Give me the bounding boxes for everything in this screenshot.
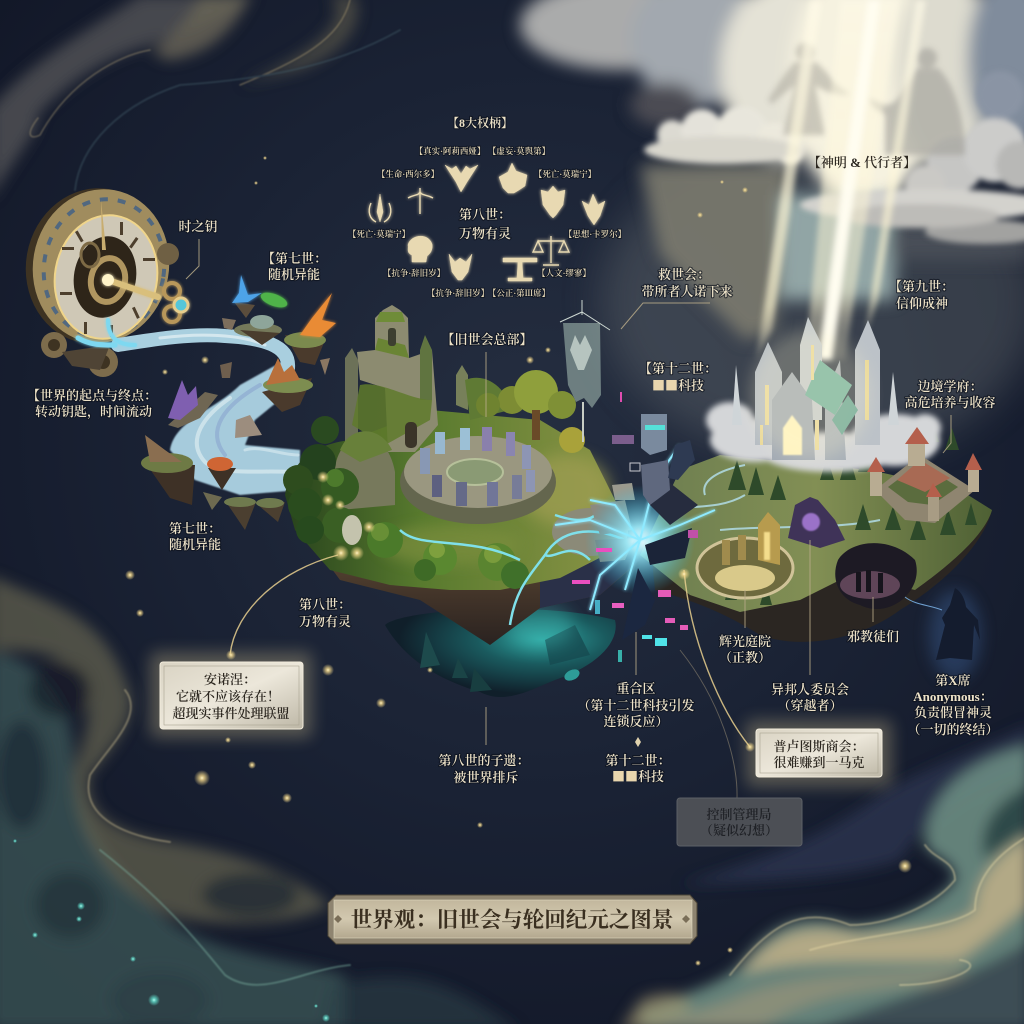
label: seat X anonymous [907,673,999,737]
authorities heading: 【8大权柄】 [447,115,513,130]
label: twelfth era top [639,361,717,394]
label: outsiders committee: （穿越者） [777,698,843,713]
sparkles [13,156,912,1022]
cracked rock [590,483,635,562]
label: eighth era remnants: 第八世的子遗： [438,753,530,768]
sky: clouds and divine figures [520,0,1024,460]
divine figure left [768,43,848,135]
label: overlap zone: 连锁反应） [603,714,669,729]
right island surface [640,455,992,612]
emblem: lion crest [499,163,527,193]
label: seat X anonymous: （一切的终结） [907,722,999,737]
label: twelfth era bottom [605,753,671,785]
hooded figure: Anonymous [905,588,981,680]
panel: Plutus guild callout [746,720,892,787]
council platform and thrones [400,427,556,524]
cult cave [835,543,917,609]
crystal shrine [788,497,845,548]
label: salvation church: 带所者人诺下来 [641,284,733,299]
authorities names [348,146,626,298]
panel: Anomie callout [150,652,312,738]
central era text: 第八世： [459,207,511,222]
label: eighth era: 万物有灵 [299,614,351,629]
island grass surface [285,410,625,590]
overlap zone: tech rift [555,392,715,683]
label: seventh era top [262,251,327,282]
panel: control bureau: （疑似幻想） [700,823,778,838]
authorities names: 【抗争·辞旧岁】 [383,268,445,278]
label: seventh era bottom [169,521,221,552]
emblem: scales [533,236,569,265]
label: twelfth era bottom: ■■科技 [612,766,664,785]
top-left band [0,0,255,200]
label: headquarters: 【旧世会总部】 [441,332,533,347]
label: overlap zone [577,681,695,729]
label: eighth era [299,597,351,629]
label: time key: 时之钥 [178,219,218,234]
river of time [78,320,300,495]
authorities names: 【真实·阿莉西娅】 [415,146,485,156]
panel: Plutus guild callout: 很难赚到一马克 [773,755,865,770]
server block [641,440,695,505]
glowing streams [400,510,625,625]
label: cultists: 邪教徒们 [847,629,899,644]
panel: control bureau [677,798,802,846]
trees [283,370,585,589]
panel: Anomie callout: 它就不应该存在！ [176,689,280,704]
label: seat X anonymous: 负责假冒神灵 [914,705,992,720]
glitch fragments [563,392,698,683]
label: seventh era bottom: 第七世： [169,521,221,536]
label: outsiders committee: 异邦人委员会 [771,682,849,697]
label: start and end of world: 转动钥匙，时间流动 [35,404,152,420]
central era text [459,207,511,241]
key: time key [102,274,188,322]
label: radiant court: （正教） [719,650,771,665]
central era text: 万物有灵 [459,226,511,241]
emblem: flaming sword [369,194,391,222]
title ornaments [334,915,690,923]
server block [641,414,667,455]
lightning cracks [555,445,715,610]
label: seat X anonymous: Anonymous： [913,689,993,704]
callout dots [226,568,755,752]
label: eighth era remnants [438,753,530,785]
label: eighth era: 第八世： [299,597,351,612]
authorities names: 【生命·西尔多】 [377,169,439,179]
label: seventh era bottom: 随机异能 [169,537,221,552]
light rays [756,0,926,360]
bottom-left teal [0,650,345,1024]
emblem: thinking head [408,236,432,262]
panel: title plate [328,895,697,944]
label: start and end of world [27,388,157,420]
authorities names: 【死亡·莫瑞宁】 [534,169,596,179]
right island underside [650,510,992,642]
main island: old-world council headquarters [283,305,640,645]
authorities names: 【思想·卡罗尔】 [564,229,626,239]
divine figure right [867,48,965,155]
label: gods and agents: 【神明 & 代行者】 [808,155,916,170]
bottom-left tan band [0,575,330,924]
radiant court [697,512,793,598]
fairy lights [317,471,375,561]
island rock underside [292,515,640,645]
label: overlap zone: 重合区 [616,681,656,696]
emblem: winged truth [445,165,478,192]
label: ninth era [889,279,954,311]
authorities names: 【抗争·辞旧岁】 [427,288,489,298]
emblem: caduceus [408,188,433,214]
authorities names: 【死亡·莫瑞宁】 [348,229,410,239]
label: salvation church [641,267,733,299]
cathedral with clouds [706,317,941,472]
label: radiant court [719,634,771,665]
floating islets: seventh era [141,275,336,530]
ruined tower [335,305,510,510]
authorities names: 【虚妄·莫舆第】 [488,146,550,156]
title text: 世界观：旧世会与轮回纪元之图景 [351,908,674,932]
underground teal island: remnants of eighth era [385,603,616,697]
icon: diamond ornament [635,737,641,747]
label: twelfth era top: 【第十二世： [639,361,717,376]
label: border academy: 边境学府： [917,379,983,394]
lower wisps [320,977,520,1024]
authorities names: 【人文·缪寥】 [537,268,591,278]
clock: time dial [14,177,188,377]
label: salvation church: 救世会： [658,267,710,282]
label group: 8 authorities [348,115,626,298]
panel: control bureau: 控制管理局 [706,807,772,822]
label: start and end of world: 【世界的起点与终点： [27,388,157,403]
forest [700,420,977,605]
label: ninth era: 【第九世： [889,279,954,294]
panel: Anomie callout: 安诺涅： [204,672,256,687]
label: radiant court: 辉光庭院 [719,634,771,649]
label: twelfth era top: ■■科技 [652,375,704,394]
label: border academy [904,379,996,410]
church banner [560,300,610,442]
label: twelfth era bottom: 第十二世： [605,753,671,768]
border academy castle [867,427,982,523]
emblem: wing blade [449,254,472,280]
right island: borderland [640,317,992,642]
label: ninth era: 信仰成神 [896,296,948,311]
label: seventh era top: 随机异能 [268,267,320,282]
bottom-right tan swirl [740,835,1024,975]
label: eighth era remnants: 被世界排斥 [453,770,519,785]
label: border academy: 高危培养与收容 [904,395,996,410]
label: overlap zone: （第十二世科技引发 [577,698,695,713]
bottom-right teal swirl [640,745,1024,1024]
emblem: flame [582,194,605,225]
emblem: crown [541,186,565,218]
leader lines [186,239,951,798]
label: outsiders committee [771,682,849,713]
panel: Anomie callout: 超现实事件处理联盟 [172,706,290,721]
label: seat X anonymous: 第X席 [935,673,971,688]
bottom-right dark blue wisp [680,725,1024,885]
authority emblems [369,163,605,281]
label: seventh era top: 【第七世： [262,251,327,266]
emblem: pillar [503,258,537,281]
authorities names: 【公正·第Ⅲ席】 [488,288,550,298]
panel: Plutus guild callout: 普卢图斯商会： [773,739,865,754]
